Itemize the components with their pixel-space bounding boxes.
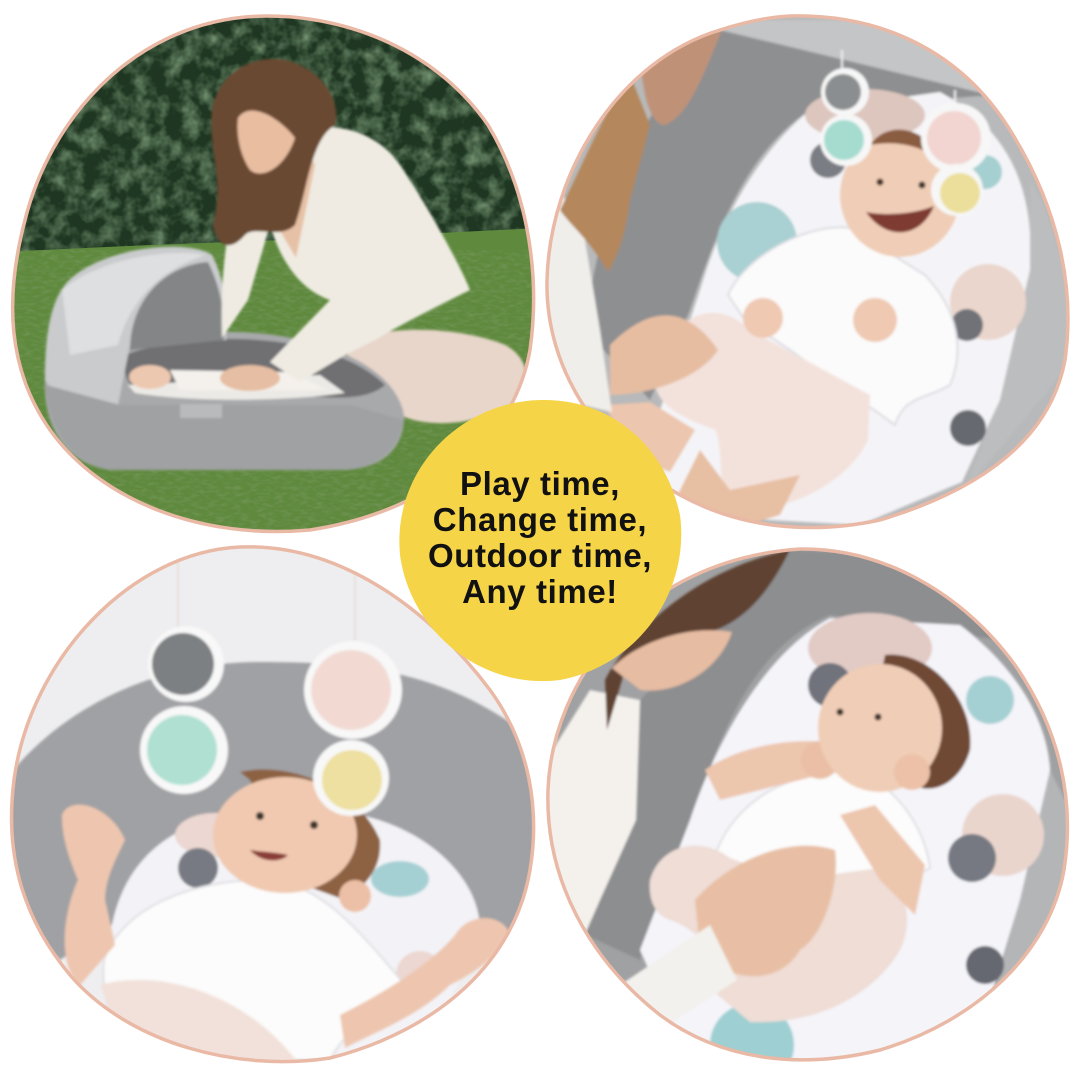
mattress bbox=[650, 92, 1031, 525]
mattress bbox=[112, 815, 480, 1060]
mattress bbox=[640, 618, 1050, 1065]
hanging toys bbox=[820, 50, 991, 216]
panel: play time photo bbox=[0, 540, 540, 1080]
parent bbox=[540, 27, 800, 530]
panel: any time photo bbox=[540, 540, 1080, 1080]
baby bbox=[650, 655, 970, 1022]
woman's legs bbox=[345, 330, 527, 423]
parent bbox=[540, 550, 836, 1030]
baby bbox=[605, 130, 960, 509]
callout: yellow badge bbox=[399, 400, 681, 681]
icon: bassinet bbox=[45, 247, 404, 470]
callout: yellow badge: Change time, bbox=[433, 501, 647, 538]
heading text: Play time, bbox=[460, 465, 620, 502]
pattern dots bbox=[717, 89, 1026, 446]
callout: yellow badge: Outdoor time, bbox=[428, 537, 652, 574]
baby bbox=[62, 769, 510, 1065]
pattern dots bbox=[174, 812, 434, 980]
pattern dots bbox=[710, 613, 1044, 1080]
panel: change time photo bbox=[540, 0, 1080, 540]
panel: outdoor time photo bbox=[0, 0, 540, 540]
callout: yellow badge: Any time! bbox=[462, 573, 618, 610]
woman bbox=[211, 59, 470, 391]
hanging toys bbox=[140, 560, 402, 816]
